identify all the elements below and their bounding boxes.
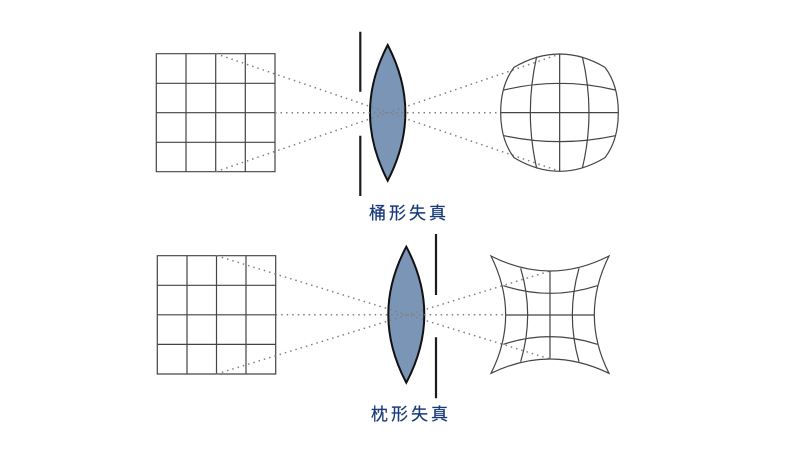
panel: barrel distortion	[156, 32, 618, 223]
label: pincushion distortion: 枕形失真	[371, 405, 451, 424]
aperture stop: barrel	[359, 32, 361, 196]
distorted grid: barrel	[501, 54, 618, 171]
light rays: pincushion	[216, 256, 550, 374]
lens: barrel	[370, 45, 405, 181]
aperture stop: pincushion	[435, 234, 437, 398]
lens: pincushion	[388, 247, 424, 383]
label: barrel distortion: 桶形失真	[369, 204, 449, 223]
source grid: barrel	[156, 54, 275, 172]
distorted grid: pincushion	[491, 256, 609, 373]
light rays: barrel	[216, 54, 560, 172]
panel: pincushion distortion	[157, 234, 609, 424]
source grid: pincushion	[157, 256, 276, 374]
